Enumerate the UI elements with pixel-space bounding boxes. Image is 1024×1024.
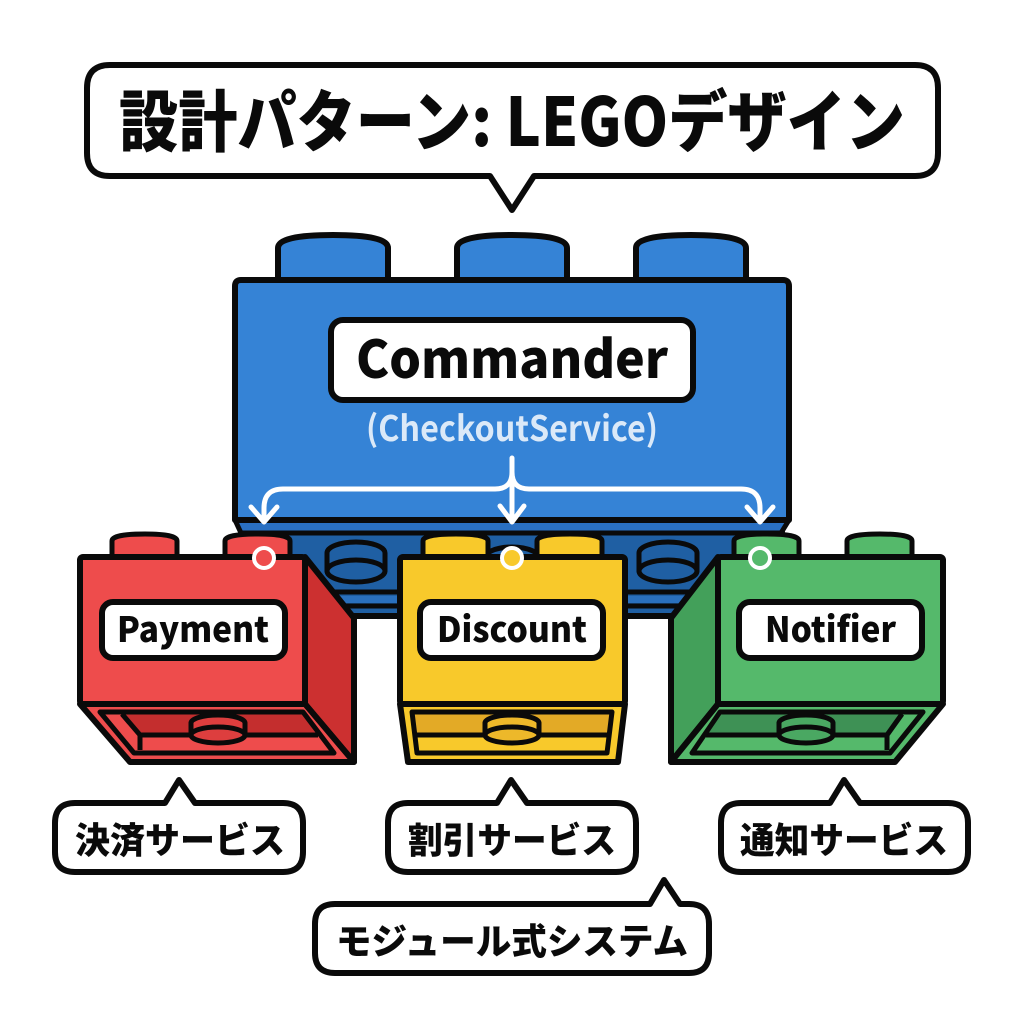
green studs <box>734 534 912 560</box>
red front face <box>80 557 305 704</box>
title callout <box>87 65 938 210</box>
Payment red brick <box>80 534 354 762</box>
title text: 設計パターン: LEGOデザイン <box>119 69 905 166</box>
blue brick underside <box>235 520 789 616</box>
red studs <box>112 534 290 560</box>
callout: discount service <box>388 780 636 872</box>
Notifier green brick <box>671 534 943 762</box>
Notifier label: Notifier <box>765 602 897 653</box>
red side face <box>305 557 354 762</box>
yellow connector ring <box>502 548 522 568</box>
Discount yellow brick <box>400 534 625 762</box>
green side face <box>671 557 718 762</box>
Notifier label <box>739 602 922 658</box>
callout: payment service <box>55 780 303 872</box>
red underside <box>80 704 354 762</box>
red connector ring <box>254 548 274 568</box>
Payment label: Payment <box>117 602 269 653</box>
green underside <box>671 704 943 762</box>
Commander label: Commander <box>356 318 669 393</box>
blue brick studs <box>278 235 746 282</box>
blue brick underside stud right <box>639 542 697 582</box>
CheckoutService caption: (CheckoutService) <box>366 401 658 452</box>
callout: modular system <box>315 880 709 973</box>
branching arrows <box>251 458 773 522</box>
callout: notifier service: 通知サービス <box>740 812 948 864</box>
yellow studs <box>423 534 602 560</box>
green connector ring <box>750 548 770 568</box>
blue brick underside stud left <box>327 542 385 582</box>
callout: discount service: 割引サービス <box>408 812 616 864</box>
blue brick underside stud centre <box>483 547 541 560</box>
yellow underside <box>400 704 625 762</box>
callout: payment service: 決済サービス <box>75 812 285 864</box>
callout: notifier service <box>721 780 968 872</box>
Commander blue brick <box>235 235 789 616</box>
blue brick face <box>235 280 789 520</box>
green front face <box>718 557 943 704</box>
Discount label: Discount <box>437 602 587 653</box>
callout: modular system: モジュール式システム <box>336 913 688 965</box>
yellow front face <box>400 557 625 704</box>
